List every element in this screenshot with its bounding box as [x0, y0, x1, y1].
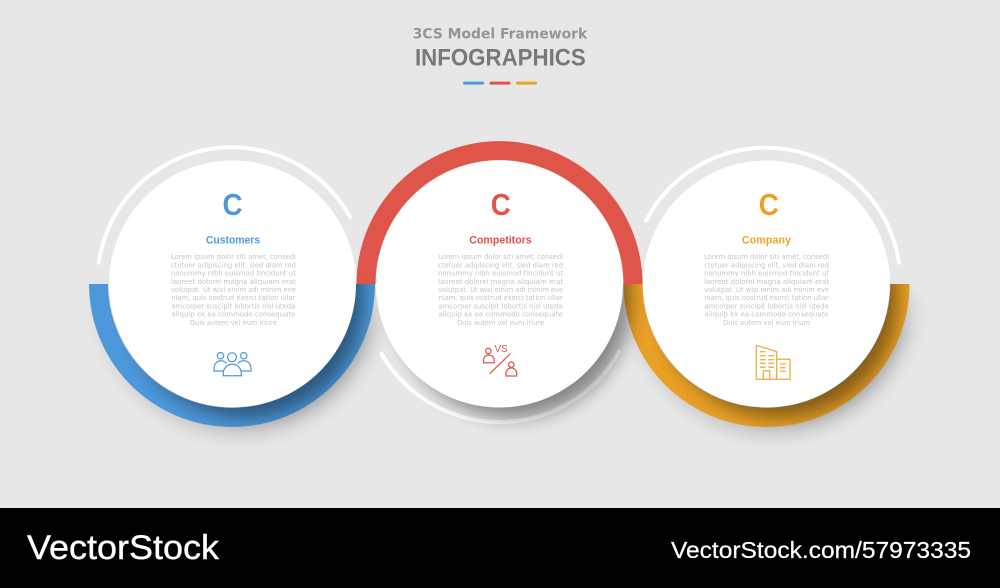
- white arc: competitors: [382, 352, 619, 422]
- white arc: customers: [99, 147, 350, 263]
- icon: people: [214, 352, 251, 376]
- white circle: [376, 160, 623, 408]
- body text: ctetuer adipiscing elit, sied diam red: [171, 261, 296, 269]
- body text: Lorem ipsum dolor siti amet, consedi: [438, 253, 563, 261]
- body text: [704, 253, 829, 327]
- white circle: [643, 160, 890, 408]
- body text: amcorper suscipit lobortis nisl uteda: [171, 302, 295, 310]
- body text: Duis autem vel eum iriure: [457, 319, 544, 327]
- body text: ctetuer adipiscing elit, sied diam red: [704, 261, 829, 269]
- icon: building: [756, 345, 790, 379]
- body text: Duis autem vel eum iriure: [723, 319, 810, 327]
- body text: laoreet dolorei magna aliquiam erat: [704, 278, 829, 286]
- circle shadows: [126, 284, 910, 430]
- body text: niam, quis nostrud exerci tation ullar: [171, 294, 296, 302]
- panel: customers: [109, 160, 356, 408]
- footer bar: [0, 508, 1000, 588]
- body text: volutpat. Ut wisi einim adi minim eve: [171, 286, 296, 294]
- ring soft shadows: [98, 298, 917, 442]
- letter C: C: [491, 187, 511, 222]
- body text: Lorem ipsum dolor siti amet, consedi: [171, 253, 296, 261]
- letter C: C: [222, 187, 242, 222]
- orange lower half ring: [624, 284, 910, 427]
- body text: nonummy nibh euismod tincidunt ut: [438, 270, 563, 278]
- body text: niam, quis nostrud exerci tation ullar: [705, 294, 829, 302]
- body text: aliquip ex ea commodo consequate: [705, 311, 829, 319]
- body text: [438, 253, 563, 327]
- body text: niam, quis nostrud exerci tation ullar: [439, 294, 563, 302]
- body text: [171, 253, 296, 327]
- body text: ctetuer adipiscing elit, sied diam red: [438, 261, 563, 269]
- red upper half ring: [356, 141, 642, 284]
- icon: versus: [484, 344, 517, 376]
- panel: company: [643, 160, 890, 408]
- title block: [413, 26, 588, 72]
- body text: nonummy nibh euismod tincidunt ut: [704, 270, 829, 278]
- body text: aliquip ex ea commodo consequate: [171, 311, 295, 319]
- body text: laoreet dolorei magna aliquiam erat: [171, 278, 296, 286]
- blue lower half ring: [89, 284, 375, 427]
- body text: volutpat. Ut wisi einim adi minim eve: [704, 286, 829, 294]
- footer brand: VectorStock: [27, 529, 220, 567]
- white circle: [109, 160, 356, 408]
- body text: Duis autem vel eum iriure: [190, 319, 277, 327]
- body text: laoreet dolorei magna aliquiam erat: [438, 278, 563, 286]
- letter C: C: [759, 187, 779, 222]
- body text: volutpat. Ut wisi einim adi minim eve: [438, 286, 563, 294]
- body text: Lorem ipsum dolor siti amet, consedi: [704, 253, 829, 261]
- icon: versus: VS: [494, 344, 508, 355]
- heading: Company: [742, 234, 792, 246]
- body text: aliquip ex ea commodo consequate: [439, 311, 563, 319]
- heading: Customers: [206, 234, 260, 246]
- colored dashes: [463, 82, 537, 85]
- footer url: VectorStock.com/57973335: [671, 537, 971, 563]
- white arc: company: [646, 148, 899, 263]
- body text: nonummy nibh euismod tincidunt ut: [171, 270, 296, 278]
- heading: Competitors: [469, 234, 532, 246]
- subtitle: 3CS Model Framework: [413, 26, 588, 42]
- panel: competitors: [376, 160, 623, 408]
- body text: amcorper suscipit lobortis nisl uteda: [439, 302, 563, 310]
- body text: amcorper suscipit lobortis nisl uteda: [705, 302, 829, 310]
- main title: INFOGRAPHICS: [415, 45, 586, 72]
